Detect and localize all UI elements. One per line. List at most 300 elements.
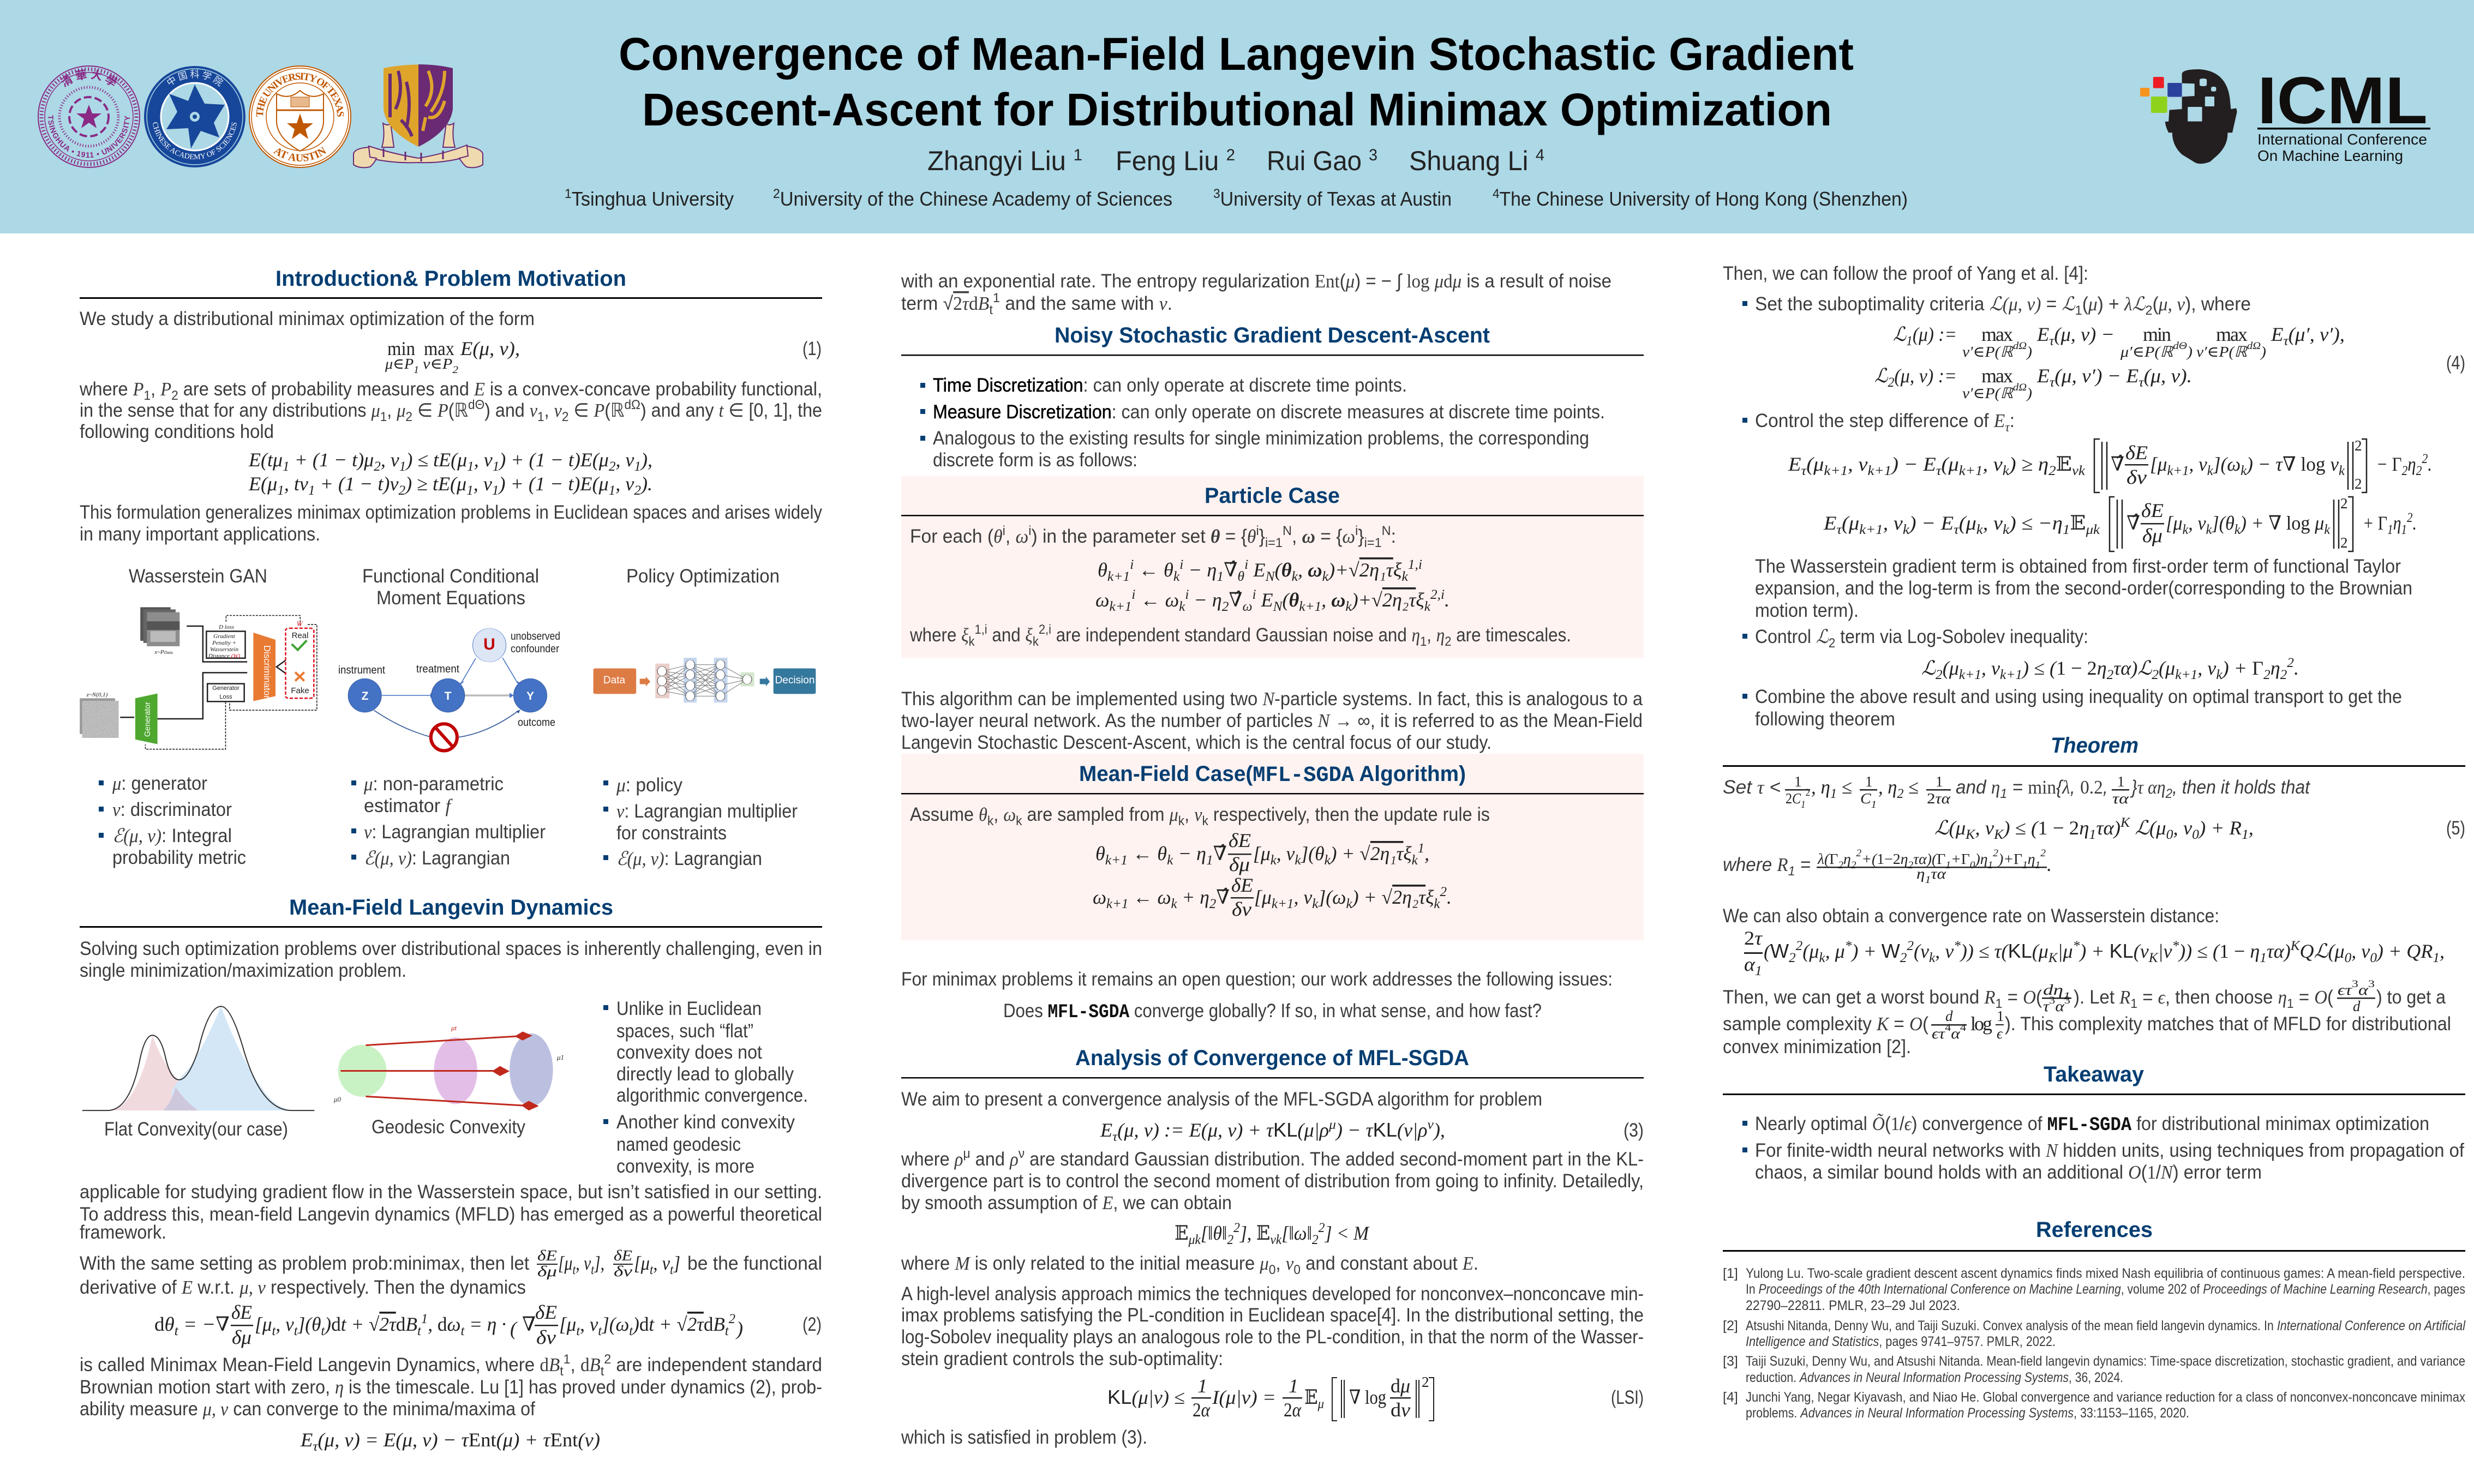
reference 4: [4] <box>1723 1390 1738 1405</box>
title: Convergence of Mean-Field Langevin Stochastic Gradient <box>619 28 1854 80</box>
list: WGAN roles <box>99 773 246 868</box>
equation 4: ν′∈P(ℝ dΩ) <box>1962 382 2032 401</box>
diagram: WGAN <box>80 607 317 749</box>
logo: ICML: International Conference <box>2257 131 2427 148</box>
equation 2 <box>154 1301 822 1348</box>
text: definitions: in the sense that for any distributions μ1, μ2 ∈ P(ℝdΘ) and ν1, ν2 ∈ P(ℝdΩ) and any t ∈ [0, 1], the <box>80 398 822 424</box>
text: functional derivative: derivative of E w.r.t. μ, ν respectively. Then the dynamics <box>80 1277 526 1298</box>
equation 3: (3) <box>1624 1120 1644 1141</box>
equations: mean-field updates: δν <box>1232 898 1251 920</box>
list: takeaways: chaos, a similar bound holds with an additional O(1/N) error term <box>1755 1162 2262 1183</box>
equation 4: Eτ(μ′, ν′), <box>2271 323 2345 349</box>
equation 4: μ′∈P(ℝ dΘ) <box>2120 340 2193 360</box>
text: minimax MFLD <box>80 1352 822 1420</box>
list: policy roles: ν: Lagrangian multiplier <box>616 801 798 822</box>
affiliations: 3University of Texas at Austin <box>1213 187 1452 210</box>
equations: convex-concave conditions <box>248 449 652 498</box>
equation: step difference lower: Eτ(μk+1, νk) − Eτ(μk, νk) ≤ −η1𝔼μk <box>1823 512 2100 537</box>
diagram: WGAN: z~N(0,1) <box>86 692 108 698</box>
text: Wasserstein term: motion term). <box>1755 600 1859 621</box>
list: FCME roles: estimator f <box>364 795 453 816</box>
diagram: WGAN: Loss <box>219 694 232 700</box>
text: MFLD introduction: To address this, mean-field Langevin dynamics (MFLD) has emerged as a powerful theoretical <box>80 1204 822 1225</box>
equation 1: (1) <box>802 338 822 359</box>
text: sample complexity: d <box>1945 1008 1953 1024</box>
equation: Wasserstein rate <box>1744 927 2445 978</box>
list: WGAN roles: μ: generator <box>112 773 207 794</box>
text: high-level analysis: log-Sobolev inequality plays an analogous role to the PL-condition, in that the norm of the Wasser- <box>901 1326 1644 1348</box>
equations: particle updates <box>1095 557 1449 614</box>
equation 4: max <box>1981 323 2013 345</box>
text: theorem conditions: , η1 ≤ <box>1811 776 1852 801</box>
text: functional derivative: With the same setting as problem prob:minimax, then let <box>80 1253 529 1274</box>
list: convexity notes: convexity, is more <box>616 1156 754 1177</box>
equation: Wasserstein rate: (W22(μk, μ*) + W22(νk, ν*)) ≤ τ(KL(μK|μ*) + KL(νK|ν*)) ≤ (1 − η1τα)KQℒ(μ0, ν0) + QR1, <box>1764 939 2445 965</box>
reference 3: reduction. Advances in Neural Information Processing Systems, 36, 2024. <box>1746 1370 2123 1385</box>
box: particle case <box>901 476 1644 658</box>
equation: Wasserstein rate: α1 <box>1744 953 1762 978</box>
box: particle case: Particle Case <box>1205 484 1340 508</box>
equation 2: δE <box>535 1301 557 1323</box>
equation 2: ( <box>510 1318 518 1339</box>
text: open question: For minimax problems it remains an open question; our work addresses the following issues: <box>901 969 1613 990</box>
text: theorem conditions: C1 <box>1860 790 1877 810</box>
equation: step difference upper: δE <box>2125 442 2148 464</box>
equation: log-Sobolev inequality <box>1107 1374 1644 1421</box>
equation: log-Sobolev inequality: 2 <box>1422 1374 1429 1390</box>
diagram: causal graph: instrument <box>338 664 385 676</box>
logo: University of the Chinese Academy of Sciences: 中 国 科 学 院 <box>167 69 224 86</box>
equation: log-Sobolev inequality: 1 <box>1289 1375 1298 1397</box>
equation 2: δν <box>536 1326 556 1348</box>
equation: log-Sobolev inequality: 1 <box>1197 1375 1207 1397</box>
equation 4: min <box>2143 323 2171 345</box>
diagram: WGAN: x~PData <box>154 649 173 656</box>
diagram: policy network: Decision <box>775 675 814 686</box>
text: sample complexity: d <box>2353 998 2361 1014</box>
reference 4: problems. Advances in Neural Information Processing Systems, 33:1153–1165, 2020. <box>1746 1405 2189 1421</box>
text: sample complexity: dη 1 <box>2043 982 2070 1002</box>
text: exponential rate: with an exponential rate. The entropy regularization Ent(μ) = − ∫ log μdμ is a result of noise <box>901 271 1612 292</box>
text: sample complexity: log <box>1970 1013 1992 1035</box>
diagram: WGAN: Real <box>292 631 308 640</box>
text: definitions: following conditions hold <box>80 421 274 442</box>
chart: flat convexity <box>82 1006 314 1140</box>
list item: combine: following theorem <box>1755 708 1895 730</box>
equation: step difference upper: ∇̂ <box>2111 453 2124 475</box>
text: sample complexity: convex minimization [2]. <box>1723 1036 1911 1058</box>
equation 4: ℒ1(μ) := <box>1893 323 1957 349</box>
text: Gaussian reference <box>901 1146 1644 1213</box>
list: WGAN roles: ν: discriminator <box>112 799 232 820</box>
equation 2: δE <box>231 1301 252 1323</box>
text: theorem conditions: 1 <box>1936 773 1943 790</box>
text: N-particle systems: Langevin Stochastic Descent-Ascent, which is the central focus of our study. <box>901 732 1491 753</box>
text: theorem conditions: τα <box>2112 790 2129 807</box>
diagram: causal graph <box>338 628 560 750</box>
equation 2: [μt, νt](θt)dt + √2τdBt1, dωt = η · <box>255 1312 506 1338</box>
box: mean-field case: Assume θk, ωk are sampled from μk, νk respectively, then the update rule is <box>910 804 1490 828</box>
equation: log-Sobolev inequality: dμ <box>1391 1375 1410 1397</box>
list: discretization: Measure Discretization: can only operate on discrete measures at discrete time points. <box>933 401 1605 423</box>
equations: mean-field updates: δE <box>1229 830 1251 851</box>
equation: step difference upper: 2 <box>2355 437 2362 454</box>
text: functional derivative <box>80 1247 822 1298</box>
reference 1: 22790–22811. PMLR, 23–29 Jul 2023. <box>1746 1298 1960 1313</box>
diagram: WGAN: Generator <box>212 685 239 692</box>
affiliations <box>565 187 1908 210</box>
list: WGAN roles: ℰ(μ, ν): Integral <box>112 825 232 846</box>
logo: Tsinghua University <box>38 66 140 167</box>
equation 4: ℒ2(μ, ν) := <box>1874 365 1957 390</box>
text: definitions <box>79 378 822 442</box>
text: sample complexity: sample complexity K = O( <box>1723 1013 1928 1035</box>
header banner <box>0 0 2474 233</box>
chart: geodesic convexity: μ1 <box>556 1053 564 1061</box>
text: proof intro: Then, we can follow the proof of Yang et al. [4]: <box>1723 263 2088 284</box>
equation: step difference lower: + Γ1η12. <box>2363 510 2417 537</box>
equation 4: ν′∈P(ℝ dΩ) <box>2196 340 2266 360</box>
heading: analysis: Analysis of Convergence of MFL-SGDA <box>1075 1046 1469 1070</box>
equations: mean-field updates: [μk, νk](θk) + √2η₁τξk1, <box>1253 841 1429 868</box>
equation: log-Sobolev inequality: KL(μ|ν) ≤ <box>1107 1386 1185 1408</box>
equation 4: max <box>2216 323 2248 345</box>
list: WGAN roles: probability metric <box>112 847 246 868</box>
text: LSI note: which is satisfied in problem (3). <box>901 1427 1147 1448</box>
text: study statement: We study a distributional minimax optimization of the form <box>80 308 535 329</box>
equation: step difference lower: [μk, νk](θk) + ∇ log μk <box>2166 512 2331 537</box>
text: high-level analysis: stein gradient controls the sub-optimality: <box>901 1348 1223 1369</box>
logo: Tsinghua University: TSINGHUA • 1911 • UNIVERSITY <box>48 115 130 158</box>
box: particle case: where ξk1,i and ξk2,i are independent standard Gaussian noise and η1, η2 are timescales. <box>909 622 1571 649</box>
diagram: WGAN: Gradient <box>213 633 236 640</box>
list item: combine <box>1742 686 2402 730</box>
text: N-particle systems: This algorithm can be implemented using two N-particle systems. In fact, this is analogous to a <box>901 688 1643 710</box>
equations: convex-concave conditions: E(tμ1 + (1 − t)μ2, ν1) ≤ tE(μ1, ν1) + (1 − t)E(μ2, ν1), <box>248 449 652 474</box>
logo: University of Texas at Austin <box>249 66 351 167</box>
equation: moment bound: 𝔼μk[‖θ‖22], 𝔼νk[‖ω‖22] < M <box>1175 1221 1370 1247</box>
list: discretization: Analogous to the existing results for single minimization problems, the corresponding <box>933 428 1589 449</box>
diagram: policy network <box>594 658 816 702</box>
equations: mean-field updates: δE <box>1231 874 1253 896</box>
text: high-level analysis: A high-level analysis approach mimics the techniques developed for nonconvex–nonconcave min- <box>901 1283 1644 1305</box>
text: exponential rate <box>901 271 1612 317</box>
sub-panel: policy optimization <box>594 566 816 869</box>
text: functional derivative: δE <box>537 1247 558 1264</box>
diagram: WGAN: Distance (W) <box>208 653 241 659</box>
sub-panel: Wasserstein GAN: Wasserstein GAN <box>129 566 267 587</box>
equation 1: E(μ, ν), <box>460 338 520 359</box>
text: functional derivative: be the functional <box>687 1253 822 1274</box>
equation: step difference upper: [μk+1, νk](ωk) − τ∇ log νk <box>2150 453 2345 478</box>
diagram: causal graph: T <box>445 690 452 702</box>
equation: log-Sobolev inequality: 2α <box>1193 1399 1211 1421</box>
diagram: policy network: Data <box>603 675 625 686</box>
heading: theorem: Theorem <box>2051 734 2138 758</box>
text: sample complexity <box>1723 978 2451 1058</box>
list: convexity notes: named geodesic <box>616 1134 741 1155</box>
text: measure note: where M is only related to the initial measure μ0, ν0 and constant about E. <box>901 1253 1478 1277</box>
equation 2: ) <box>735 1318 743 1339</box>
logo: Tsinghua University: 清 華 大 學 <box>60 69 118 87</box>
equation 5 <box>1934 815 2465 842</box>
list: convexity notes: algorithmic convergence. <box>616 1085 808 1106</box>
reference 2: [2] <box>1723 1318 1738 1333</box>
panel: references <box>1723 1218 2466 1421</box>
logo: ICML: On Machine Learning <box>2257 147 2403 164</box>
text: functional derivative: [μt, νt], <box>558 1252 604 1277</box>
list: convexity notes: convexity does not <box>616 1042 762 1063</box>
chart: flat convexity: Flat Convexity(our case) <box>104 1119 288 1140</box>
equations: mean-field updates: δμ <box>1229 854 1250 875</box>
heading: dynamics: Mean-Field Langevin Dynamics <box>289 896 613 920</box>
reference 1: In Proceedings of the 40th International Conference on Machine Learning, volume 202 of Proceedings of Machine Learning Research, pages <box>1746 1282 2465 1297</box>
equation 2: (2) <box>802 1314 822 1335</box>
text: Wasserstein term <box>1755 556 2412 621</box>
equation: step difference upper: δν <box>2126 466 2147 488</box>
heading: noisy SGDA: Noisy Stochastic Gradient Descent-Ascent <box>1055 323 1490 347</box>
text: sample complexity: Then, we can get a worst bound R1 = O( <box>1723 987 2042 1011</box>
text: theorem conditions: and η1 = min{λ, 0.2, <box>1956 777 2108 801</box>
sub-panel: Wasserstein GAN <box>80 566 317 868</box>
equation: step difference lower: δE <box>2141 500 2164 521</box>
text: open question: Does MFL-SGDA converge globally? If so, in what sense, and how fast? <box>1003 1000 1542 1023</box>
equation 4 <box>1874 323 2465 401</box>
equation: step difference lower <box>1823 495 2417 551</box>
equation: Wasserstein rate: 2τ <box>1744 927 1763 949</box>
text: challenge <box>80 938 822 981</box>
text: sample complexity: ) to get a <box>2376 987 2446 1008</box>
authors: Feng Liu 2 <box>1116 146 1235 176</box>
box: mean-field case: Mean-Field Case(MFL-SGDA Algorithm) <box>1079 762 1466 788</box>
list: FCME roles <box>351 773 546 869</box>
text: theorem conditions: 1 <box>1865 773 1872 790</box>
logo: CUHK Shenzhen <box>354 64 483 167</box>
logo: ICML <box>2140 63 2430 164</box>
text: theorem conditions: }τ αη2, then it holds that <box>2130 777 2310 801</box>
reference 2: Intelligence and Statistics, pages 9741–9757. PMLR, 2022. <box>1746 1334 2056 1349</box>
reference 2 <box>1723 1318 2466 1349</box>
diagram: causal graph: outcome <box>518 717 555 729</box>
reference 1: [1] <box>1723 1266 1738 1281</box>
equations: particle updates: θk+1i ← θki − η1∇̂θi EN(θk, ωk)+√2η₁τξk1,i <box>1098 557 1422 584</box>
title <box>619 28 1854 135</box>
equation 4: Eτ(μ, ν′) − Eτ(μ, ν). <box>2036 365 2192 390</box>
list item: suboptimality criteria: Set the suboptimality criteria ℒ(μ, ν) = ℒ1(μ) + λℒ2(μ, ν), where <box>1755 293 2251 318</box>
diagram: causal graph: U <box>483 635 495 653</box>
list: FCME roles: ℰ(μ, ν): Lagrangian <box>364 848 510 869</box>
list: takeaways <box>1742 1113 2464 1183</box>
chart: geodesic convexity: Geodesic Convexity <box>372 1116 525 1138</box>
list: FCME roles: μ: non-parametric <box>363 773 504 795</box>
text: challenge: Solving such optimization problems over distributional spaces is inherently challenging, even in <box>80 938 822 959</box>
list: convexity notes: Unlike in Euclidean <box>616 998 762 1019</box>
diagram: WGAN: Generator <box>143 702 152 737</box>
list: policy roles: μ: policy <box>616 774 682 796</box>
text: exponential rate: term √2τdBt1 and the same with ν. <box>901 291 1172 317</box>
equation: step difference lower: ∇̂ <box>2126 512 2140 534</box>
heading: takeaway: Takeaway <box>2044 1062 2144 1086</box>
text: sample complexity: ϵτ4α4 <box>1932 1022 1967 1042</box>
equation: L2 recursion: ℒ2(μk+1, νk+1) ≤ (1 − 2η2τα)ℒ2(μk+1, νk) + Γ2η22. <box>1921 656 2299 682</box>
list: convexity notes: spaces, such “flat” <box>616 1020 753 1042</box>
reference 3 <box>1723 1354 2465 1385</box>
text: high-level analysis: imax problems satisfying the PL-condition in Euclidean space[4]. In the distributional setting, the <box>901 1305 1644 1326</box>
text: theorem conditions: 2τα <box>1927 790 1951 807</box>
equation: log-Sobolev inequality: dν <box>1391 1399 1410 1421</box>
text: MFLD introduction <box>80 1181 822 1243</box>
authors: Zhangyi Liu 1 <box>927 146 1082 176</box>
list: FCME roles: ν: Lagrangian multiplier <box>364 821 546 843</box>
list: discretization <box>920 375 1605 471</box>
equation 4: max <box>1981 365 2013 387</box>
equation 4: Eτ(μ, ν) − <box>2036 323 2114 349</box>
list: convexity notes: directly lead to globally <box>616 1064 794 1085</box>
equation: log-Sobolev inequality: 2α <box>1284 1399 1302 1421</box>
equation: entropy regularized objective: Eτ(μ, ν) = E(μ, ν) − τEnt(μ) + τEnt(ν) <box>300 1429 600 1454</box>
logo: University of Texas at Austin: THE UNIVERSITY OF TEXAS <box>254 71 346 117</box>
equations: mean-field updates: ωk+1 ← ωk + η2∇̂ <box>1093 886 1230 911</box>
text: functional derivative: δμ <box>537 1263 557 1279</box>
list: takeaways: For finite-width neural networks with N hidden units, using techniques from propagation of <box>1755 1140 2464 1161</box>
list: convexity notes: Another kind convexity <box>616 1112 795 1133</box>
text: theorem conditions <box>1723 773 2310 810</box>
equations: mean-field updates: [μk+1, νk](ωk) + √2η₂τξk2. <box>1254 885 1452 911</box>
equation 4: ν′∈P(ℝ dΩ) <box>1962 340 2032 360</box>
box: particle case: For each (θi, ωi) in the parameter set θ = {θi}i=1N, ω = {ωi}i=1N: <box>910 524 1396 550</box>
equation: step difference upper: − Γ2η22. <box>2376 452 2432 478</box>
text: sample complexity: ϵ <box>1997 1025 2003 1042</box>
list: policy roles <box>603 774 798 869</box>
diagram: causal graph: unobserved <box>511 630 560 642</box>
panel: introduction and problem motivation <box>79 267 822 869</box>
equation 1: ν∈P 2 <box>423 356 459 376</box>
equation 5: (5) <box>2446 818 2465 839</box>
diagram: causal graph: confounder <box>511 643 559 655</box>
diagram: causal graph: Y <box>526 690 534 702</box>
equations: mean-field updates <box>1093 830 1452 920</box>
text: Gaussian reference: by smooth assumption of E, we can obtain <box>901 1192 1232 1213</box>
list item: log-Sobolev control: Control ℒ2 term via Log-Sobolev inequality: <box>1755 626 2088 651</box>
equation: R1 definition: where R1 = <box>1723 854 1811 879</box>
equation: step difference lower: δμ <box>2142 525 2162 546</box>
text: Wasserstein term: expansion, and the log-term is from the second-order(corresponding to the Brownian <box>1755 578 2412 599</box>
affiliations: 1Tsinghua University <box>565 187 734 210</box>
text: Wasserstein term: The Wasserstein gradient term is obtained from first-order term of functional Taylor <box>1755 556 2401 577</box>
equation 2: [μt, νt](ωt)dt + √2τdBt2 <box>559 1312 735 1338</box>
list: policy roles: ℰ(μ, ν): Lagrangian <box>616 848 762 869</box>
text: high-level analysis <box>901 1283 1644 1369</box>
authors <box>927 146 1544 176</box>
text: sample complexity: ). This complexity matches that of MFLD for distributional <box>2005 1013 2451 1035</box>
text: definitions: where P1, P2 are sets of probability measures and E is a convex-concave probability functional, <box>79 378 822 403</box>
equations: particle updates: ωk+1i ← ωki − η2∇̂ωi EN(θk+1, ωk)+√2η₂τξk2,i. <box>1095 587 1449 614</box>
sub-panel: functional conditional moment equations: Moment Equations <box>376 587 525 609</box>
text: theorem conditions: 2C12 <box>1786 787 1810 810</box>
logo: University of the Chinese Academy of Sciences: CHINESE ACADEMY OF SCIENCES <box>153 122 237 159</box>
text: functional derivative: δν <box>614 1263 632 1279</box>
chart: geodesic convexity <box>333 1024 564 1138</box>
text: sample complexity: ϵτ 3α3 <box>2338 978 2375 998</box>
reference 4 <box>1723 1390 2465 1421</box>
text: functional derivative: δE <box>614 1247 633 1264</box>
chart: geodesic convexity: μt <box>451 1024 457 1032</box>
sub-panel: policy optimization: Policy Optimization <box>626 566 780 587</box>
equation: step difference upper: 2 <box>2355 476 2362 492</box>
heading: references: References <box>2036 1218 2153 1242</box>
panel: takeaway <box>1723 1062 2465 1183</box>
equation 2: δμ <box>232 1326 251 1348</box>
panel: column two continuation and noisy SGDA <box>901 271 1644 1023</box>
text: generalization: in many important applications. <box>80 524 320 545</box>
affiliations: 4The Chinese University of Hong Kong (Shenzhen) <box>1493 187 1908 210</box>
list: convexity notes <box>603 998 808 1177</box>
text: open question <box>901 969 1613 1023</box>
equation 1: max <box>424 338 454 359</box>
affiliations: 2University of the Chinese Academy of Sciences <box>773 187 1172 210</box>
text: theorem conditions: Set τ < <box>1723 777 1781 798</box>
text: generalization: This formulation generalizes minimax optimization problems in Euclidean spaces and arises widely <box>80 502 822 523</box>
diagram: WGAN: Wasserstein <box>210 646 239 653</box>
text: theorem conditions: , η2 ≤ <box>1878 776 1919 801</box>
text: functional derivative: [μt, νt] <box>634 1252 680 1277</box>
equation 3: Eτ(μ, ν) := E(μ, ν) + τKL(μ|ρμ) − τKL(ν|ρν), <box>1100 1117 1445 1144</box>
list item: combine: Combine the above result and using using inequality on optimal transport to get the <box>1755 686 2402 707</box>
diagram: WGAN: Discriminator <box>262 645 272 699</box>
title: Descent-Ascent for Distributional Minimax Optimization <box>642 84 1832 135</box>
diagram: WGAN: W <box>297 620 303 628</box>
text: N-particle systems: two-layer neural network. As the number of particles N → ∞, it is referred to as the Mean-Field <box>901 710 1643 731</box>
text: theorem conditions: 1 <box>2117 773 2124 790</box>
text: minimax MFLD: ability measure μ, ν can converge to the minima/maxima of <box>80 1398 535 1420</box>
sub-panel: functional conditional moment equations <box>338 566 560 869</box>
equation: log-Sobolev inequality: 𝔼μ <box>1304 1386 1324 1411</box>
diagram: WGAN: D loss <box>218 624 234 630</box>
text: Wasserstein rate intro: We can also obtain a convergence rate on Wasserstein distance: <box>1723 905 2219 927</box>
text: N-particle systems <box>901 688 1643 753</box>
panel: mean-field Langevin dynamics <box>80 896 822 1454</box>
equation: step difference lower: 2 <box>2340 534 2348 551</box>
text: MFLD introduction: framework. <box>80 1222 166 1243</box>
panel: column three proof outline <box>1723 263 2465 730</box>
authors: Rui Gao 3 <box>1267 146 1377 176</box>
equations: mean-field updates: θk+1 ← θk − η1∇̂ <box>1095 843 1227 868</box>
equation: step difference upper <box>1788 437 2432 492</box>
equation: R1 definition <box>1723 848 2052 886</box>
list: discretization: Time Discretization: can only operate at discrete time points. <box>933 375 1407 396</box>
list item: step difference: Control the step difference of Eτ: <box>1755 410 2015 435</box>
list: policy roles: for constraints <box>616 822 727 844</box>
authors: Shuang Li 4 <box>1409 146 1544 176</box>
equation: R1 definition: η1τα <box>1916 866 1946 886</box>
diagram: WGAN: Penalty + <box>212 640 236 646</box>
logo: ICML: ICML <box>2257 63 2428 137</box>
text: sample complexity: 1 <box>1997 1008 2004 1024</box>
logo: University of the Chinese Academy of Sciences <box>144 66 245 167</box>
equation: R1 definition: . <box>2047 854 2052 875</box>
text: theorem conditions: 1 <box>1794 773 1801 790</box>
equation 2: ∇ <box>522 1313 536 1335</box>
list: discretization: discrete form is as follows: <box>933 449 1137 471</box>
equation 1: μ∈P1 <box>385 356 419 376</box>
sub-panel: functional conditional moment equations: Functional Conditional <box>362 566 539 587</box>
diagram: causal graph: Z <box>362 690 369 702</box>
heading: introduction: Introduction& Problem Motivation <box>275 267 626 291</box>
equation 1: min <box>387 338 415 359</box>
equation: log-Sobolev inequality: ∇ log <box>1349 1386 1386 1408</box>
chart: geodesic convexity: μ0 <box>333 1095 342 1103</box>
text: minimax MFLD: Brownian motion start with zero, η is the timescale. Lu [1] has proved under dynamics (2), prob- <box>80 1377 822 1398</box>
